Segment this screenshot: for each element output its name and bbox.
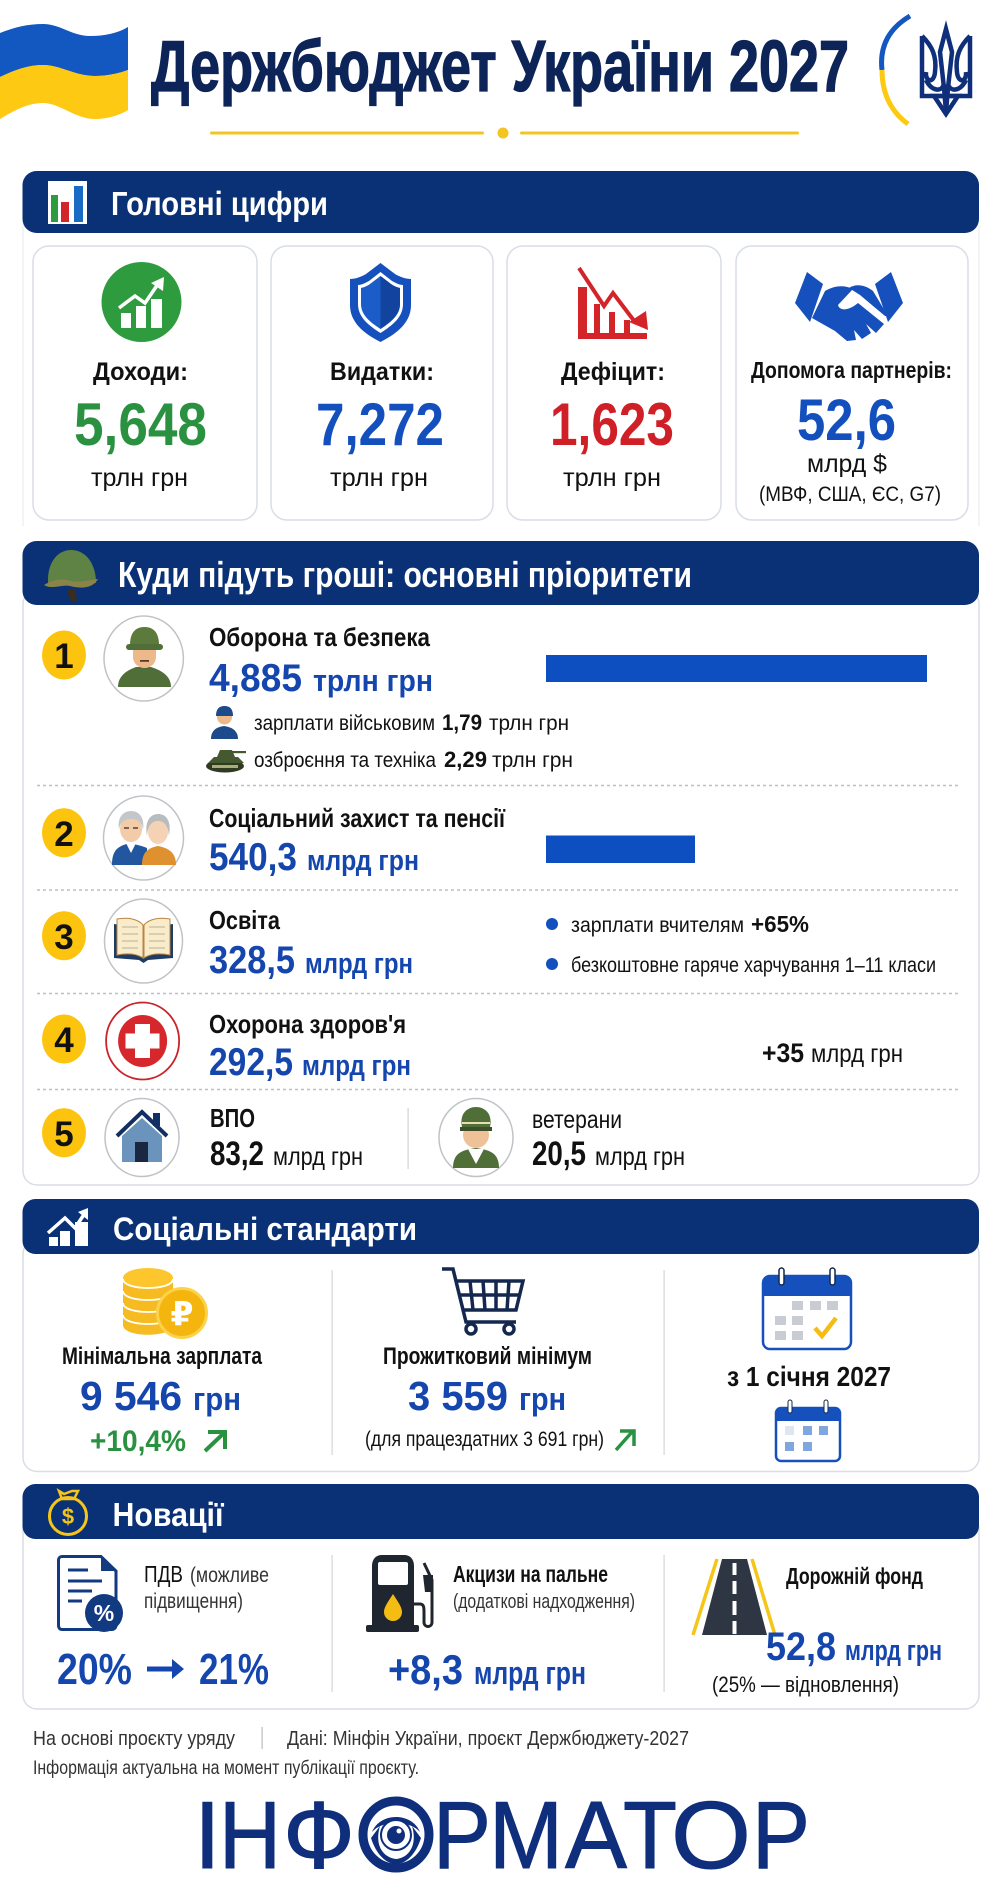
value: education: млрд грн	[305, 948, 413, 980]
section header: innovations: Новації	[112, 1496, 224, 1533]
number badge 2: 2	[54, 815, 74, 854]
icon: small calendar	[776, 1400, 840, 1461]
number badge 3	[42, 911, 86, 960]
bar: defence	[546, 655, 927, 682]
logo: Informator: Т	[623, 1782, 677, 1889]
block: road fund: Дорожній фонд	[786, 1563, 923, 1589]
block: effective date: з 1 січня 2027	[727, 1361, 891, 1392]
card: deficit: трлн грн	[563, 464, 661, 492]
number badge 4	[42, 1014, 86, 1064]
text: weapons: 2,29	[444, 747, 487, 772]
section header: key figures: Головні цифри	[111, 185, 328, 222]
text: veterans: млрд грн	[595, 1143, 685, 1171]
text: veterans: 20,5	[532, 1135, 586, 1173]
card: partner aid: Допомога партнерів:	[751, 357, 952, 383]
value: social	[209, 836, 419, 879]
value: healthcare: 292,5	[209, 1041, 293, 1084]
icon: shield	[350, 263, 411, 342]
number badge 2	[42, 808, 86, 857]
row 4: healthcare: Охорона здоров'я	[209, 1009, 406, 1039]
block: minimum wage: Мінімальна зарплата	[62, 1343, 263, 1370]
text: military salaries: 1,79	[442, 710, 482, 735]
text: military salaries: трлн грн	[489, 712, 569, 735]
text: IDPs: ВПО	[210, 1103, 255, 1133]
card: deficit: Дефіцит:	[561, 358, 665, 386]
text: excise label	[453, 1561, 635, 1613]
bullet: free hot meals: безкоштовне гаряче харчування 1–11 класи	[571, 954, 936, 977]
text: weapons: трлн грн	[492, 749, 573, 772]
icon: tank	[206, 750, 246, 772]
card: partner aid: млрд $	[807, 450, 887, 478]
value: VAT change: 20%	[57, 1645, 132, 1694]
title divider	[210, 128, 799, 138]
text: weapons: озброєння та техніка	[254, 749, 436, 772]
arrow: VAT increase	[147, 1659, 184, 1679]
value: education	[209, 939, 413, 982]
icon: book avatar	[104, 899, 182, 983]
text: +35 bn: +35	[762, 1038, 804, 1068]
block: subsistence minimum: Прожитковий мінімум	[383, 1343, 592, 1370]
icon: large calendar	[763, 1268, 851, 1349]
text: IDPs: 83,2	[210, 1135, 264, 1173]
logo: Informator: Р	[752, 1782, 810, 1889]
card: revenue: 5,648	[74, 391, 207, 458]
card: expenditure: трлн грн	[330, 464, 428, 492]
value: road fund: 52,8	[766, 1625, 836, 1669]
icon: money bag: $	[62, 1504, 74, 1529]
block: minimum wage: +10,4%	[90, 1425, 186, 1458]
logo: Informator: Ф	[283, 1782, 355, 1889]
block: fuel excise	[366, 1555, 635, 1693]
block: subsistence minimum: (для працездатних 3 691 грн)	[365, 1428, 604, 1451]
panel: innovations	[22, 1484, 979, 1709]
number badge 3: 3	[54, 918, 74, 957]
row 5: IDPs and veterans	[42, 1098, 685, 1176]
value: social: млрд грн	[307, 845, 419, 877]
bullet: teachers salaries: +65%	[751, 911, 809, 937]
icon: road	[693, 1559, 775, 1635]
block: road fund	[693, 1559, 942, 1697]
value: excise	[388, 1646, 586, 1693]
icon: bar chart	[48, 181, 87, 224]
logo: Informator: А	[565, 1782, 627, 1889]
text: military salaries	[254, 710, 569, 735]
icon: money bag	[50, 1491, 86, 1534]
value: excise: млрд грн	[474, 1655, 586, 1691]
number badge 1	[42, 630, 86, 680]
value: healthcare: млрд грн	[302, 1050, 411, 1082]
value: healthcare	[209, 1041, 411, 1084]
row 2: social protection: Соціальний захист та пенсії	[209, 803, 506, 833]
card: expenditure: Видатки:	[330, 358, 434, 386]
section header: social standards	[22, 1199, 979, 1254]
icon: coins	[123, 1268, 206, 1338]
bullet: teachers salaries	[546, 911, 809, 937]
value: subsistence minimum	[408, 1373, 566, 1419]
card: partner aid: 52,6	[797, 388, 896, 453]
logo: Informator: Р	[433, 1782, 491, 1889]
value: minimum wage	[80, 1373, 241, 1419]
text: excise label: Акцизи на пальне	[453, 1561, 608, 1587]
text: VAT label	[144, 1561, 269, 1613]
icon: fuel pump	[366, 1555, 433, 1632]
text: VAT label: ПДВ	[144, 1561, 183, 1587]
panel: spending priorities	[22, 541, 979, 1185]
arrow: up	[205, 1432, 225, 1451]
logo: Informator	[194, 1782, 810, 1889]
icon: coins: ₽	[171, 1295, 193, 1332]
value: defence total	[209, 657, 433, 700]
card: revenue: трлн грн	[91, 464, 188, 492]
icon: growth chart	[102, 262, 182, 342]
text: +35 bn: млрд грн	[811, 1040, 903, 1068]
section header: social standards: Соціальні стандарти	[113, 1211, 417, 1247]
block: VAT	[57, 1556, 269, 1694]
block: subsistence minimum	[365, 1269, 634, 1451]
value: road fund	[766, 1625, 942, 1669]
icon: document percent	[58, 1556, 123, 1632]
card: partner aid	[736, 246, 968, 520]
logo: Informator: М	[489, 1782, 563, 1889]
value: minimum wage: 9 546	[80, 1373, 182, 1419]
icon: helmet	[44, 550, 98, 602]
icon: falling chart	[578, 268, 648, 339]
icon: growth arrow	[48, 1208, 88, 1246]
row 1: defence: Оборона та безпека	[209, 622, 430, 652]
arrow: up	[616, 1431, 634, 1450]
card: revenue: Доходи:	[93, 358, 188, 386]
value: defence total: 4,885	[209, 657, 302, 700]
value: social: 540,3	[209, 836, 297, 879]
card: deficit: 1,623	[550, 391, 674, 458]
block: road fund: (25% — відновлення)	[712, 1672, 899, 1697]
row 2: social protection	[42, 796, 695, 880]
footer notes: На основі проєкту уряду	[33, 1728, 235, 1750]
icon: elderly couple avatar	[104, 796, 184, 880]
text: excise label: (додаткові надходження)	[453, 1591, 635, 1613]
row 1: defence	[42, 616, 927, 772]
footer notes: Дані: Мінфін України, проєкт Держбюджету-2027	[287, 1728, 689, 1750]
value: excise: +8,3	[388, 1646, 463, 1693]
icon: document percent: %	[94, 1600, 114, 1626]
logo: Informator: Н	[219, 1782, 281, 1889]
card: deficit	[507, 246, 721, 520]
text: VAT label: підвищення)	[144, 1590, 243, 1613]
value: minimum wage: грн	[193, 1381, 241, 1417]
card: expenditure: 7,272	[316, 391, 444, 458]
block: effective date	[727, 1268, 891, 1461]
footer notes: Інформація актуальна на момент публікації проєкту.	[33, 1758, 419, 1779]
block: minimum wage	[62, 1268, 263, 1458]
text: IDPs	[210, 1103, 363, 1173]
row 3: education	[42, 899, 936, 983]
icon: shopping cart	[442, 1269, 523, 1334]
footer notes	[33, 1727, 689, 1779]
panel: social standards	[22, 1199, 979, 1472]
icon: eye in letter O	[363, 1801, 429, 1868]
value: education: 328,5	[209, 939, 295, 982]
number badge 5: 5	[54, 1115, 74, 1154]
panel: key figures	[22, 171, 979, 526]
section header: priorities	[22, 541, 979, 605]
card: expenditure	[271, 246, 493, 520]
icon: trident emblem	[882, 16, 970, 124]
bar: social	[546, 836, 695, 863]
row 4: healthcare	[42, 1002, 903, 1084]
value: defence total: трлн грн	[313, 663, 433, 698]
card: revenue	[33, 246, 257, 520]
value: subsistence minimum: 3 559	[408, 1373, 508, 1419]
row 3: education: Освіта	[209, 905, 280, 935]
icon: medical cross	[106, 1002, 179, 1080]
text: veterans	[532, 1106, 685, 1173]
text: IDPs: млрд грн	[273, 1143, 363, 1171]
text: veterans: ветерани	[532, 1106, 622, 1134]
text: weapons	[254, 747, 573, 772]
logo: Informator: О	[671, 1782, 751, 1889]
card: partner aid: (МВФ, США, ЄС, G7)	[759, 483, 941, 506]
number badge 5	[42, 1108, 86, 1157]
section header: priorities: Куди підуть гроші: основні пріоритети	[118, 554, 692, 595]
value: VAT change: 21%	[199, 1645, 269, 1694]
text: VAT label: (можливе	[190, 1564, 269, 1587]
text: +35 bn	[762, 1038, 903, 1068]
icon: serviceman	[211, 706, 238, 739]
value: VAT change	[57, 1645, 269, 1694]
bullet: teachers salaries: зарплати вчителям	[571, 914, 744, 937]
section header: key figures	[22, 171, 979, 233]
icon: veteran avatar	[439, 1098, 513, 1176]
logo: Informator: І	[194, 1782, 221, 1889]
number badge 1: 1	[54, 637, 74, 676]
section header: innovations	[22, 1484, 979, 1539]
icon: handshake	[795, 272, 903, 341]
text: military salaries: зарплати військовим	[254, 712, 435, 735]
value: subsistence minimum: грн	[519, 1381, 566, 1417]
value: road fund: млрд грн	[845, 1635, 942, 1667]
icon: Ukrainian flag	[0, 24, 128, 119]
icon: house avatar	[105, 1098, 179, 1176]
number badge 4: 4	[54, 1021, 74, 1060]
icon: soldier avatar	[104, 616, 183, 701]
